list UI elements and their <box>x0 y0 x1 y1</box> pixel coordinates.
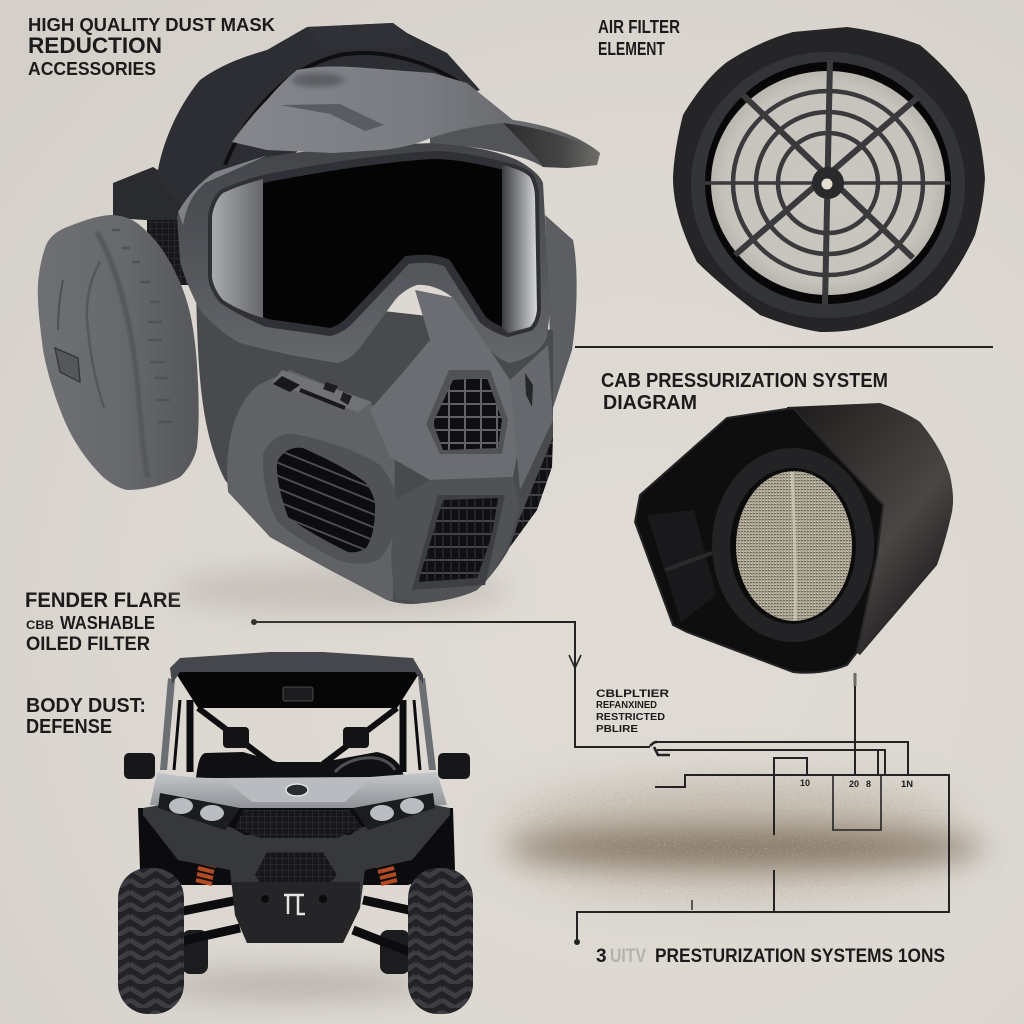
right cheek panel <box>510 345 553 490</box>
ground shadow <box>160 971 430 999</box>
footer caption: PRESTURIZATION SYSTEMS 1ONS <box>655 945 945 967</box>
upper grille <box>235 810 362 838</box>
left inner wall <box>647 510 716 622</box>
title: high quality dust mask: ACCESSORIES <box>28 59 156 79</box>
heading: fender flare: OILED FILTER <box>26 633 150 655</box>
retaining ring <box>712 448 874 642</box>
outer black rim <box>673 27 985 332</box>
main enclosure box <box>577 775 949 941</box>
head strap hood <box>113 23 480 222</box>
right slit <box>525 373 533 407</box>
divider line <box>575 346 993 348</box>
front left wheel <box>118 868 184 1014</box>
cheek panel <box>227 370 395 600</box>
wiring diagram <box>251 619 949 945</box>
heading: air filter element: AIR FILTER <box>598 17 680 37</box>
heading: fender flare: WASHABLE <box>60 613 155 633</box>
cab mirrors <box>223 727 369 748</box>
centre hub <box>812 167 844 199</box>
rim ring <box>691 52 965 318</box>
icon: UTV side-by-side front view <box>118 652 473 1014</box>
mesh filter <box>736 471 852 621</box>
callout: cab filter small text <box>596 688 669 735</box>
mask ground shadow <box>170 566 510 614</box>
mesh seam <box>792 472 795 620</box>
steering wheel <box>335 758 395 772</box>
goggle lens <box>212 155 537 333</box>
visor peak <box>232 66 600 168</box>
footer caption: UITV <box>610 946 646 967</box>
under-visor frame band <box>430 120 543 167</box>
winch logo <box>261 895 327 914</box>
callout: cab filter small text: PBLIRE <box>596 723 638 735</box>
right lower vent <box>510 437 553 547</box>
inner ribs <box>665 553 712 570</box>
suspension arms <box>177 900 418 955</box>
nose vent <box>426 370 508 454</box>
inner chamber box <box>833 775 881 830</box>
heading: cab pressurization system diagram: DIAGRAM <box>603 392 697 414</box>
callout: cab filter small text: REFANXINED <box>596 699 657 711</box>
heading: fender flare: FENDER FLARE <box>25 589 181 612</box>
roof <box>170 652 423 684</box>
headlights <box>158 793 435 830</box>
dome light <box>283 687 313 701</box>
lower skid plate <box>232 882 360 943</box>
label: diagram numbers: 10 <box>800 778 810 788</box>
lower grille <box>255 852 337 883</box>
dust cloud <box>495 778 985 902</box>
icon: cab pressurizer filter housing <box>635 403 953 686</box>
heading: air filter element: ELEMENT <box>598 39 665 59</box>
title: high quality dust mask: HIGH QUALITY DUST MASK <box>28 15 275 35</box>
wheel wells <box>138 808 455 885</box>
title: high quality dust mask <box>28 15 275 79</box>
inner collar <box>730 468 856 624</box>
footer caption: 3 <box>596 946 607 967</box>
label: diagram numbers: 20 <box>849 779 859 789</box>
filter media <box>711 71 945 295</box>
hood <box>150 772 447 808</box>
hood center panel <box>223 778 370 802</box>
heading: body dust defense: DEFENSE <box>26 716 112 738</box>
heading: body dust defense: BODY DUST: <box>26 695 146 717</box>
nose bridge panel <box>370 290 520 480</box>
heading: air filter element <box>598 17 680 59</box>
icon: respirator mask with goggles and visor <box>38 23 600 614</box>
probe mark <box>691 900 693 910</box>
heading: fender flare: CBB <box>26 618 54 632</box>
rear wheels <box>182 930 410 974</box>
left cheek vent <box>263 434 397 564</box>
seats and dash <box>196 752 404 778</box>
pressure lines <box>650 675 908 912</box>
chin frame <box>391 477 520 603</box>
A pillars <box>160 678 436 770</box>
roll cage <box>174 700 420 772</box>
coil shocks <box>196 862 397 884</box>
callout: cab filter small text: RESTRICTED <box>596 711 665 723</box>
goggle frame <box>177 143 550 363</box>
visor underside tip <box>503 123 600 168</box>
side slots plate <box>272 370 372 412</box>
title: high quality dust mask: REDUCTION <box>28 33 162 58</box>
front shroud <box>635 408 883 673</box>
mask base shell <box>196 290 553 604</box>
goggle frame highlight <box>178 155 268 225</box>
heading: cab pressurization system diagram: CAB PRESSURIZATION SYSTEM <box>601 370 888 392</box>
drain fitting mark <box>854 673 856 686</box>
left ear cup <box>38 215 199 490</box>
label: diagram numbers: 1N <box>901 779 913 789</box>
visor shadow and slot <box>280 73 384 131</box>
label: diagram numbers <box>800 778 913 789</box>
heading: cab pressurization system diagram <box>601 370 888 414</box>
side strap webbing <box>147 220 199 285</box>
callout: cab filter small text: CBLPLTIER <box>596 688 669 700</box>
label: diagram numbers: 8 <box>866 779 871 789</box>
side mirrors <box>124 753 470 779</box>
icon: round air filter element <box>673 27 985 332</box>
cylindrical housing <box>780 403 953 655</box>
chin vent <box>412 495 505 590</box>
heading: fender flare <box>25 589 181 655</box>
right ear cup <box>545 215 577 408</box>
black gap <box>705 62 951 304</box>
end dot <box>574 939 580 945</box>
canopy underside <box>175 672 420 708</box>
bumper fascia <box>143 805 450 943</box>
front right wheel <box>408 868 473 1014</box>
arrow: feed line from fender flare label <box>251 619 650 747</box>
spider ring cage <box>705 60 950 305</box>
hood badge <box>286 784 308 796</box>
heading: body dust defense <box>26 695 146 738</box>
